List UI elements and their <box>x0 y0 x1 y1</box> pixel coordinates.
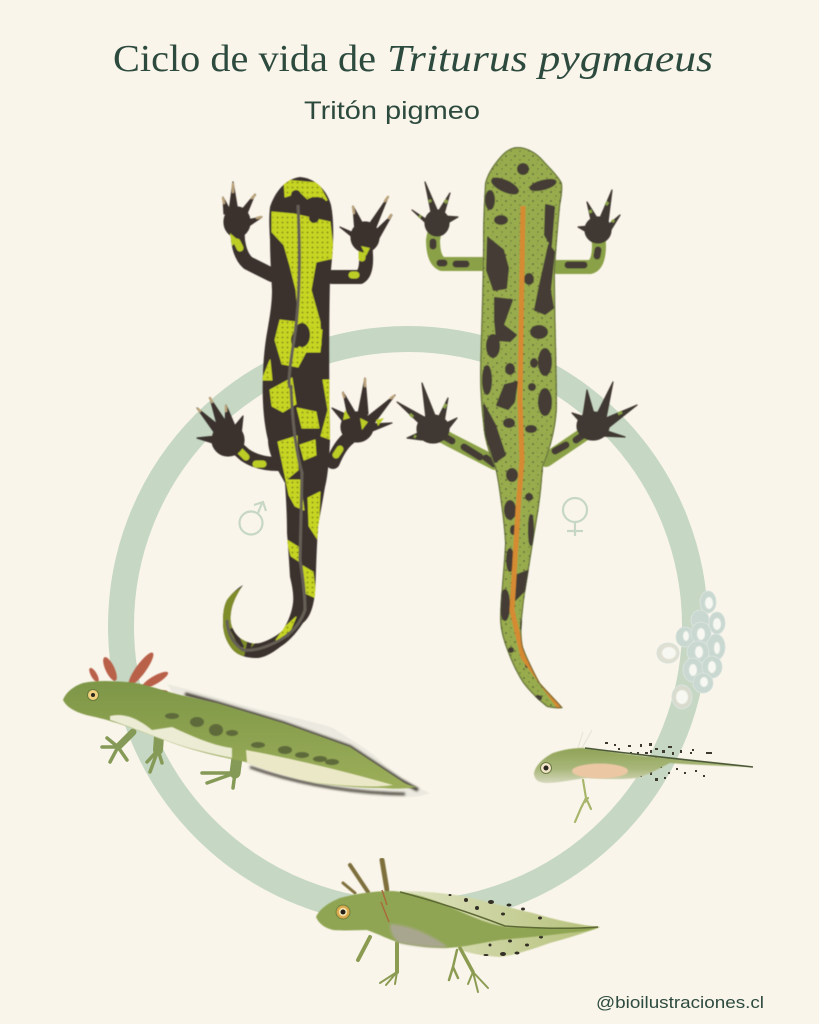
title: Ciclo de vida de <box>113 38 376 80</box>
gill stalks <box>343 860 387 893</box>
side markings <box>165 713 339 765</box>
male symbol <box>240 502 266 534</box>
larva body <box>63 681 417 789</box>
title <box>113 38 713 80</box>
female dark blotches <box>483 164 557 700</box>
subtitle: Tritón pigmeo <box>304 97 480 125</box>
male finger tips <box>198 184 394 411</box>
larva eye <box>88 690 98 700</box>
male yellow hand marks <box>230 233 384 430</box>
red gill marks <box>381 890 389 922</box>
egg shells <box>657 591 725 709</box>
male body and tail <box>222 176 334 659</box>
larva eye <box>540 762 552 774</box>
gill wisps <box>578 730 592 748</box>
larva body <box>534 748 753 783</box>
grey belly <box>390 924 448 947</box>
cream belly <box>110 715 232 758</box>
fin <box>400 891 600 957</box>
medium larva <box>316 860 600 992</box>
male yellow markings <box>262 180 334 640</box>
male hands <box>197 182 395 456</box>
fin dark fringes <box>185 694 418 790</box>
tail fin <box>167 684 430 797</box>
adult male newt <box>197 170 395 665</box>
fin speckles <box>605 742 712 781</box>
female legs <box>433 224 599 464</box>
egg highlights <box>662 597 721 704</box>
male legs <box>228 222 366 464</box>
life cycle ring <box>121 339 695 913</box>
adult female newt <box>397 140 637 715</box>
fin speckles <box>448 894 557 956</box>
female orange stripe <box>512 206 560 708</box>
title: Triturus pygmaeus <box>387 38 713 80</box>
small larva with yolk <box>534 730 753 822</box>
cream tail band <box>246 750 393 786</box>
female hands <box>397 182 637 443</box>
female edge shading <box>480 147 563 708</box>
female finger bands <box>410 200 622 437</box>
eggs cluster <box>657 591 725 709</box>
female body and tail <box>479 146 564 710</box>
larva legs <box>102 723 238 788</box>
credit handle: @bioilustraciones.cl <box>596 993 764 1012</box>
eye <box>336 905 350 919</box>
legs <box>358 937 488 992</box>
female symbol <box>563 498 587 536</box>
body <box>316 891 600 948</box>
male dark blots on head <box>290 190 326 348</box>
gills <box>87 650 170 702</box>
male tail tip <box>222 587 256 656</box>
dorsal line <box>400 892 598 928</box>
yolk sac <box>572 764 628 778</box>
larva limb <box>575 780 591 822</box>
large larva with red gills <box>63 650 430 797</box>
male spine stripe <box>227 205 305 650</box>
